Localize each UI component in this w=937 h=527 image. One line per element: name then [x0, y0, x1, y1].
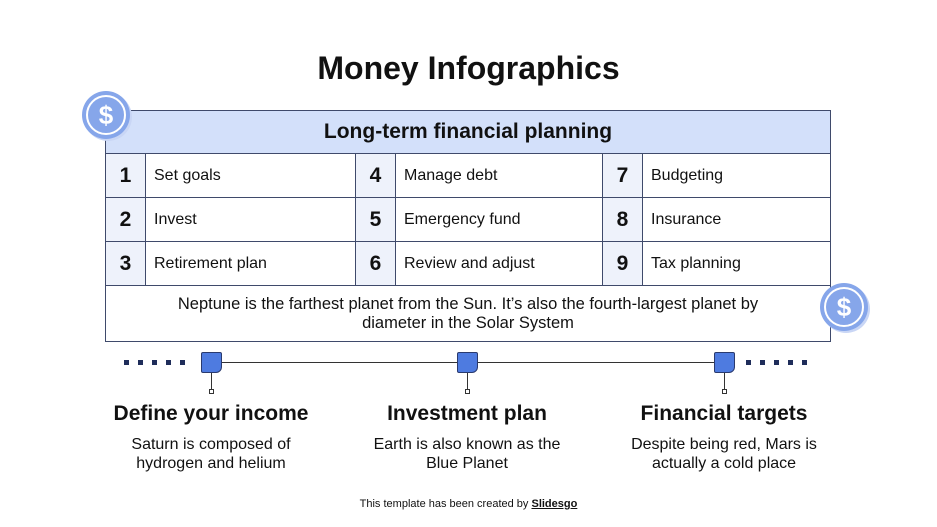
title: Money Infographics	[317, 50, 620, 86]
row 2	[105, 198, 831, 241]
row 3: 9	[617, 252, 628, 274]
row 3	[105, 242, 831, 285]
row 1: 7	[617, 164, 628, 186]
table header: Long-term financial planning	[324, 120, 612, 143]
row 1: 1	[120, 164, 131, 186]
row 3: 6	[370, 252, 381, 274]
note	[105, 285, 831, 342]
step: define your income: Define your income	[114, 402, 308, 425]
step: investment plan	[374, 402, 560, 472]
row 1: Budgeting	[651, 166, 723, 184]
row 3: Retirement plan	[154, 254, 267, 272]
table	[105, 110, 831, 342]
step: investment plan: Earth is also known as the	[374, 436, 560, 453]
row 2: Insurance	[651, 210, 721, 228]
row 2: 8	[617, 208, 628, 230]
row 2: Invest	[154, 210, 197, 228]
step: financial targets: actually a cold place	[652, 455, 796, 472]
icon: dollar coin right	[820, 283, 870, 333]
note: Neptune is the farthest planet from the Sun. It’s also the fourth-largest planet by	[178, 294, 758, 312]
icon: dollar coin right: $	[837, 292, 852, 322]
step: define your income	[114, 402, 308, 472]
row 1: Manage debt	[404, 166, 497, 184]
row 3: Tax planning	[651, 254, 741, 272]
marker 3	[714, 352, 735, 373]
row 2: Emergency fund	[404, 210, 521, 228]
step: financial targets: Financial targets	[641, 402, 807, 425]
step: define your income: Saturn is composed of	[131, 436, 291, 453]
step: define your income: hydrogen and helium	[136, 455, 286, 472]
row 1: Set goals	[154, 166, 221, 184]
row 2: 5	[370, 208, 381, 230]
row 1: 4	[370, 164, 381, 186]
row 3: Review and adjust	[404, 254, 535, 272]
step: investment plan: Blue Planet	[426, 455, 508, 472]
icon: dollar coin left: $	[99, 100, 114, 130]
row 2: 2	[120, 208, 131, 230]
step: financial targets: Despite being red, Mars is	[631, 436, 817, 453]
note: diameter in the Solar System	[362, 314, 574, 332]
marker 1	[201, 352, 222, 373]
row 3: 3	[120, 252, 131, 274]
row 1	[105, 154, 831, 197]
timeline	[124, 352, 807, 394]
icon: dollar coin left	[82, 91, 132, 141]
step: investment plan: Investment plan	[387, 402, 547, 425]
step: financial targets	[631, 402, 817, 472]
footer: This template has been created by Slidesgo	[360, 498, 577, 510]
table header	[105, 110, 831, 154]
marker 2	[457, 352, 478, 373]
